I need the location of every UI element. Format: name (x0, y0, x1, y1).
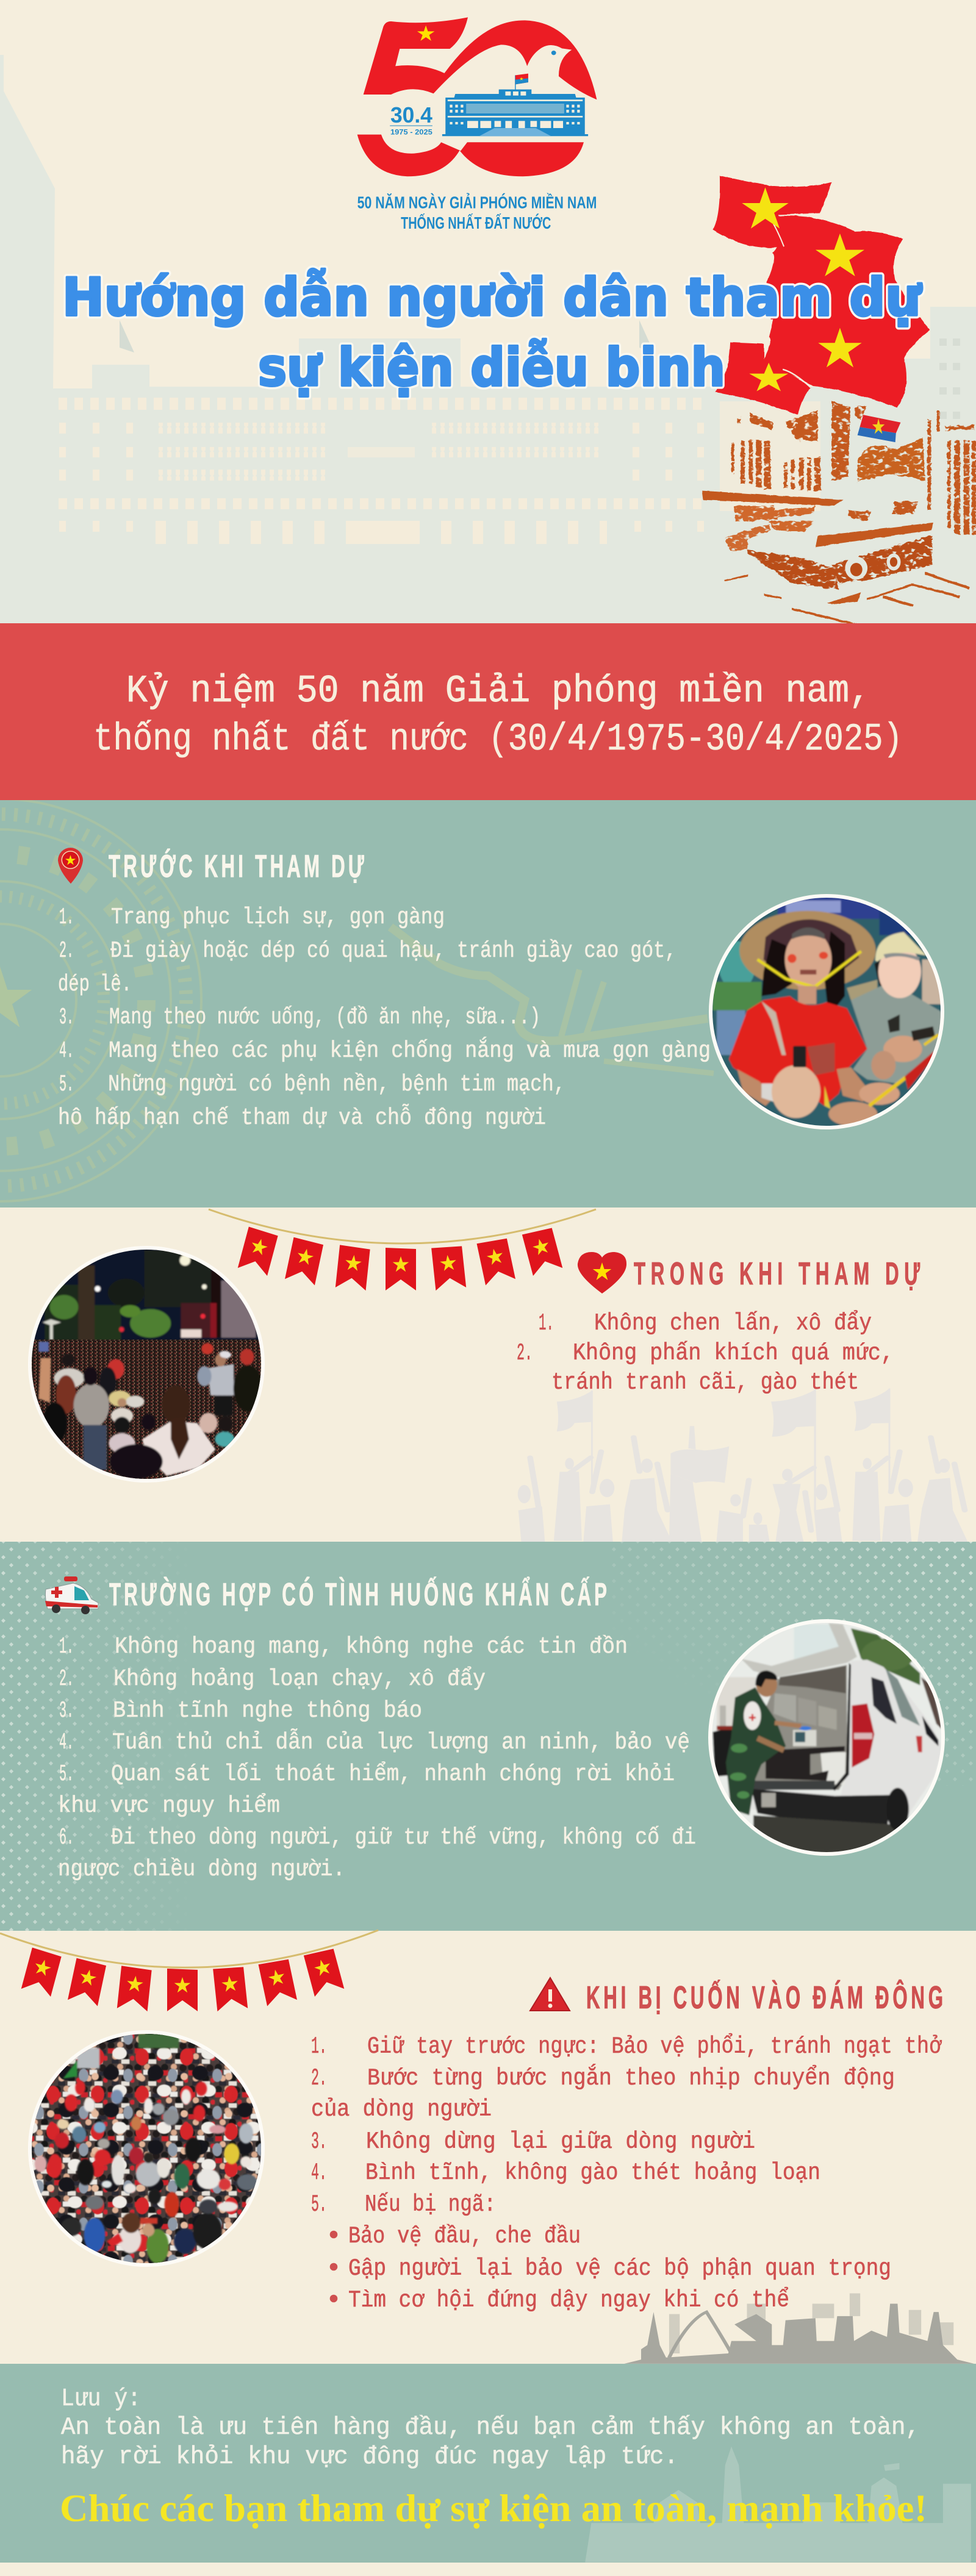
checklist: 5. (59, 1761, 74, 1787)
panel: before attending (0, 799, 976, 1208)
checklist: Quan sát lối thoát hiểm, nhanh chóng rời khỏi (111, 1761, 675, 1787)
banner: anniversary (0, 623, 976, 800)
checklist: Bình tĩnh, không gào thét hoảng loạn (365, 2159, 820, 2186)
checklist: hô hấp hạn chế tham dự và chỗ đông người (58, 1103, 546, 1131)
background city silhouette (0, 55, 976, 624)
logo: 50 years anniversary: THỐNG NHẤT ĐẤT NƯỚC (401, 213, 551, 233)
checklist: 2. (517, 1340, 533, 1367)
note text: hãy rời khỏi khu vực đông đúc ngay lập tức. (61, 2443, 678, 2471)
photo: crowd in daylight (28, 2030, 268, 2269)
palace building (442, 74, 588, 136)
checklist: 4. (311, 2159, 327, 2186)
logo: 50 years anniversary: 1975 - 2025 (390, 128, 432, 136)
pale city skyline (585, 2447, 971, 2563)
bunting: top centre (209, 1209, 596, 1290)
photo: crowd at night (28, 1246, 265, 1483)
checklist: Tuân thủ chỉ dẫn của lực lượng an ninh, bảo vệ (112, 1728, 690, 1756)
illustration: waving flags (712, 175, 930, 415)
hat (739, 911, 876, 990)
checklist: ngược chiều dòng người. (58, 1856, 345, 1883)
title: Hướng dẫn người dân tham dự (62, 267, 923, 328)
checklist: Không chen lấn, xô đẩy (594, 1310, 872, 1337)
icon: warning triangle (530, 1978, 570, 2011)
bumper (752, 1789, 891, 1825)
right woman (851, 986, 942, 1084)
checklist: 4. (59, 1038, 74, 1064)
hero panel (0, 17, 976, 632)
icon: heart with star (578, 1252, 626, 1293)
checklist: 5. (311, 2191, 327, 2218)
checklist: của dòng người (311, 2096, 492, 2123)
checklist: Bảo vệ đầu, che đầu (348, 2223, 581, 2250)
checklist (517, 1310, 894, 1396)
photo: ambulance and medic (708, 1619, 945, 1856)
tailgate (741, 1623, 857, 1677)
bunting: top left (0, 1930, 378, 2011)
gray city skyline (624, 2294, 974, 2364)
checklist: Không phấn khích quá mức, (573, 1340, 894, 1367)
checklist: Đi giày hoặc dép có quai hậu, tránh giầy cao gót, (110, 938, 676, 964)
checklist: 1. (59, 904, 74, 931)
interior (753, 1665, 847, 1790)
logo caption: 50 NĂM NGÀY GIẢI PHÓNG MIỀN NAM (357, 193, 597, 212)
title: sự kiện diễu binh (258, 337, 725, 398)
tail light (852, 1703, 874, 1767)
logo: 50 years anniversary (357, 17, 597, 233)
checklist: 3. (59, 1004, 74, 1031)
checklist: dép lê. (58, 971, 132, 998)
checklist: Mang theo các phụ kiện chống nắng và mưa gọn gàng (109, 1036, 711, 1064)
dove eye (551, 51, 556, 55)
icon: ambulance (45, 1576, 98, 1614)
checklist (58, 1634, 696, 1883)
soldier (726, 1687, 786, 1816)
banner: anniversary: Kỷ niệm 50 năm Giải phóng miền nam, (126, 670, 870, 713)
checklist: Đi theo dòng người, giữ tư thế vững, không cố đi (111, 1825, 696, 1851)
checklist: 3. (311, 2128, 327, 2155)
heading: KHI BỊ CUỐN VÀO ĐÁM ĐÔNG (586, 1980, 943, 2016)
panel: emergency (0, 1542, 976, 1931)
checklist: 5. (59, 1072, 74, 1098)
panel: note and closing message (0, 2364, 976, 2563)
checklist: tránh tranh cãi, gào thét (551, 1369, 859, 1396)
illustration: tank at palace (702, 401, 976, 632)
checklist: Không hoang mang, không nghe các tin đồn (115, 1634, 628, 1660)
note text (61, 2385, 920, 2471)
checklist: Trang phục lịch sự, gọn gàng (111, 904, 445, 931)
heading: TRONG KHI THAM DỰ (634, 1256, 920, 1292)
checklist: Không dừng lại giữa dòng người (366, 2128, 755, 2155)
panel: caught in a crowd (0, 1930, 974, 2364)
checklist: Bước từng bước ngắn theo nhịp chuyển động (367, 2064, 895, 2092)
checklist: 2. (59, 938, 74, 964)
note text: Lưu ý: (61, 2385, 141, 2413)
checklist: 2. (311, 2065, 327, 2092)
heading: TRƯỚC KHI THAM DỰ (109, 848, 364, 884)
checklist (311, 2033, 942, 2314)
red shirt (729, 996, 867, 1106)
checklist: 6. (59, 1825, 74, 1851)
title (62, 267, 923, 398)
checklist: khu vực nguy hiểm (58, 1792, 280, 1819)
digit five and dove (364, 17, 597, 99)
logo date: 30.4 (390, 102, 432, 127)
checklist: Những người có bệnh nền, bệnh tim mạch, (108, 1072, 565, 1098)
checklist: 1. (311, 2033, 327, 2060)
checklist: Không hoảng loạn chạy, xô đẩy (113, 1665, 486, 1692)
note text: An toàn là ưu tiên hàng đầu, nếu bạn cảm thấy không an toàn, (61, 2414, 920, 2442)
bronze drum motif (0, 799, 714, 1201)
background crowd silhouette (518, 1389, 967, 1542)
title: Hướng dẫn người dân tham dự (62, 267, 923, 328)
digit zero lower arc (357, 135, 584, 176)
checklist: 3. (59, 1698, 74, 1724)
title: sự kiện diễu binh (258, 337, 725, 398)
checklist: 1. (539, 1310, 554, 1337)
van body (752, 1659, 941, 1811)
closing message: Chúc các bạn tham dự sự kiện an toàn, mạnh khỏe! (60, 2486, 927, 2530)
heading: TRƯỜNG HỢP CÓ TÌNH HUỐNG KHẨN CẤP (109, 1576, 607, 1612)
checklist: Bình tĩnh nghe thông báo (113, 1698, 422, 1724)
photo: women with conical hat (709, 894, 944, 1130)
checklist (58, 904, 711, 1131)
checklist: Mang theo nước uống, (đồ ăn nhẹ, sữa...) (109, 1004, 540, 1031)
checklist: 1. (59, 1634, 74, 1660)
icon: location pin (58, 848, 83, 884)
panel: during attending (28, 1209, 967, 1542)
halftone dots (0, 1542, 976, 1931)
checklist: 2. (59, 1666, 74, 1692)
checklist: 4. (59, 1730, 74, 1756)
checklist: Tìm cơ hội đứng dậy ngay khi có thể (348, 2287, 789, 2314)
logo star (417, 26, 434, 41)
checklist: Nếu bị ngã: (365, 2191, 496, 2218)
checklist: Gập người lại bảo vệ các bộ phận quan trọng (348, 2255, 891, 2282)
